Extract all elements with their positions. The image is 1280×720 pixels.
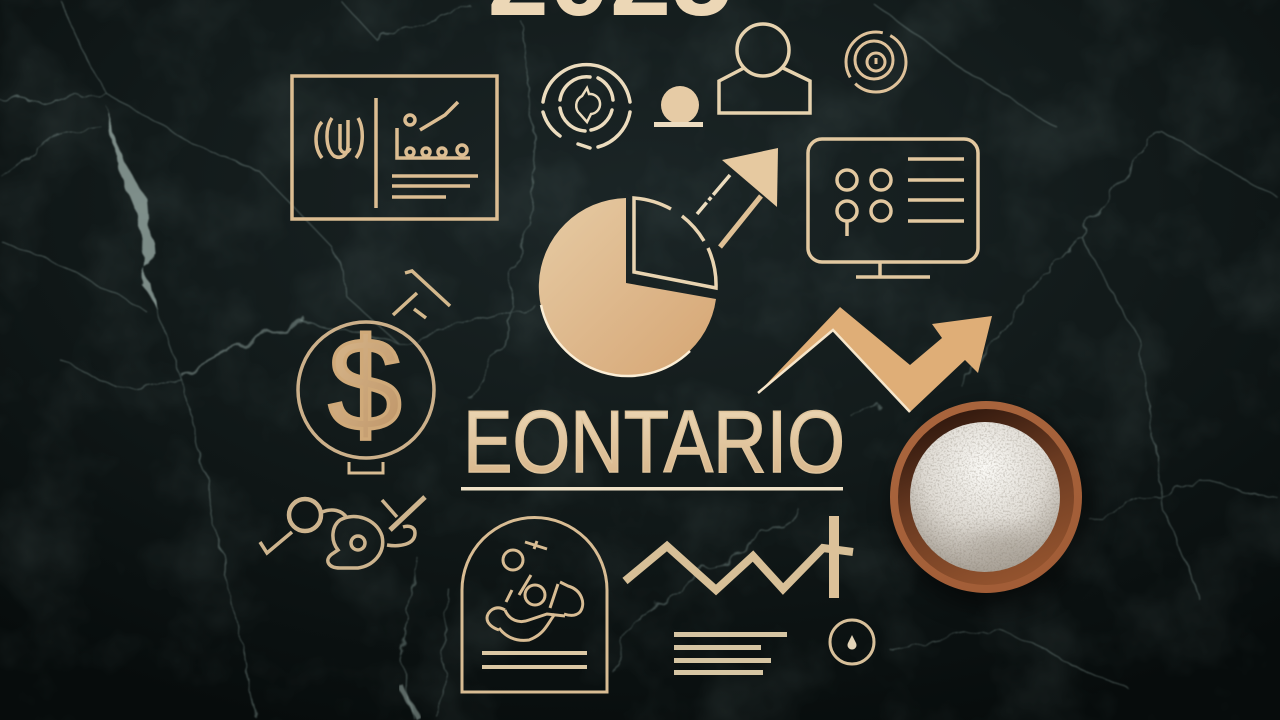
- icon: monitor with list: [808, 139, 978, 277]
- icon: arched card: [462, 518, 607, 692]
- text lines block: [674, 632, 787, 675]
- pie chart with detached slice: [539, 198, 716, 376]
- icon: spiral coin: [846, 32, 906, 92]
- detached slice outline: [634, 198, 716, 288]
- zigzag line chart: [625, 516, 853, 598]
- heading: EONTARIO: EONTARIO: [463, 392, 845, 491]
- icon: small droplet circle: [830, 620, 874, 664]
- divider under heading: [461, 487, 843, 490]
- zigzag growth arrow: [758, 307, 992, 412]
- arrow: rising from pie: [697, 148, 778, 247]
- bright marble vein: [106, 105, 158, 310]
- icon: dollar coin: $: [328, 311, 402, 458]
- icon: dashboard panel top left: [292, 76, 497, 219]
- icon: glasses and tools doodle: [260, 497, 425, 568]
- icon: concentric target: [543, 65, 630, 148]
- bowl of salt: [890, 401, 1092, 608]
- icon: small gold dome on base: [654, 86, 703, 127]
- icon: dollar coin: [298, 271, 450, 473]
- icon: person outline: [719, 24, 810, 113]
